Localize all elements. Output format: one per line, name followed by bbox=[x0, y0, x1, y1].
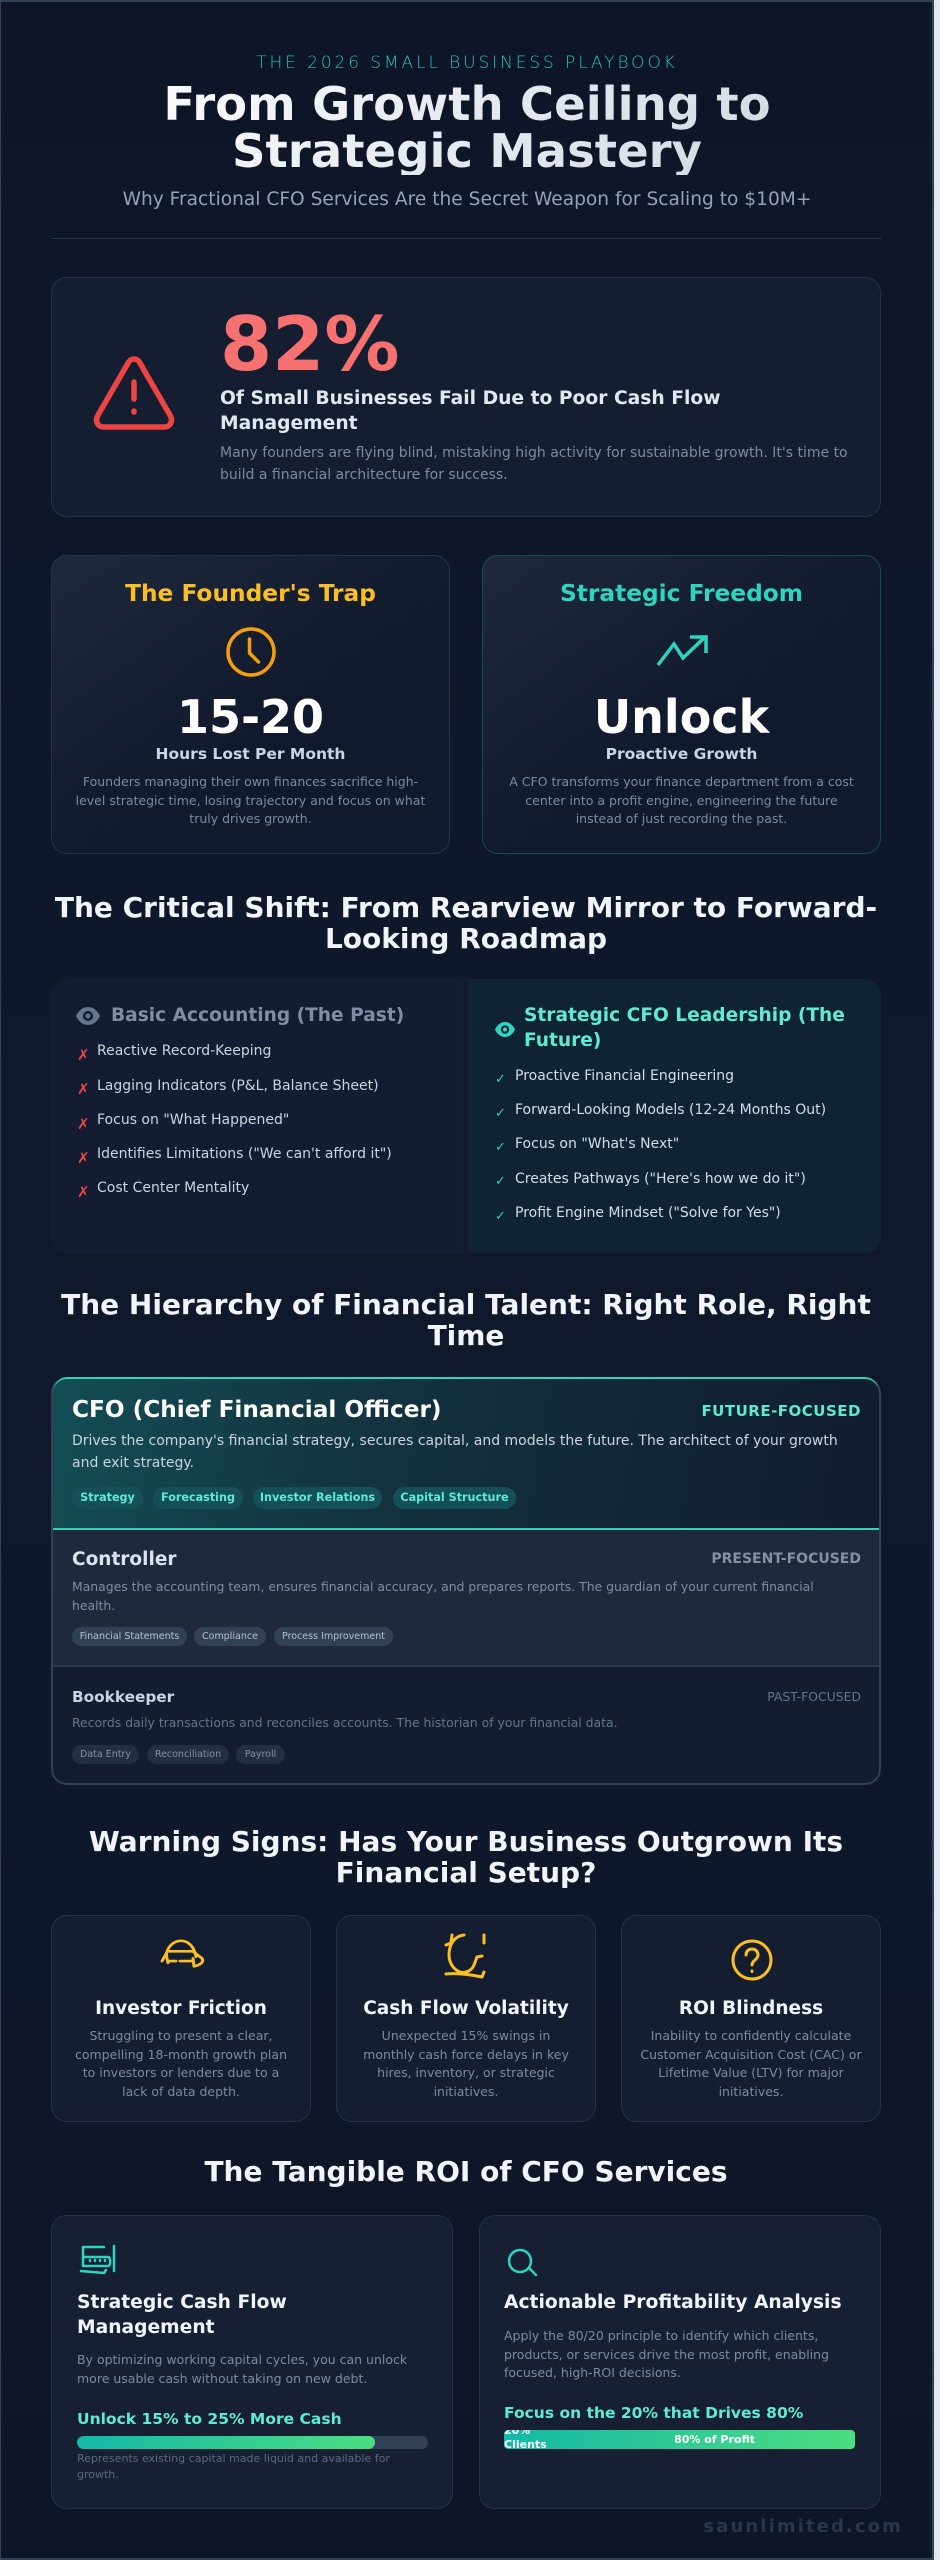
tags bbox=[72, 1627, 393, 1646]
metric label: Unlock 15% to 25% More Cash bbox=[77, 2410, 342, 2428]
tags bbox=[80, 1487, 516, 1509]
headline: Of Small Businesses Fail Due to Poor Cash Flow bbox=[220, 388, 720, 409]
description: Unexpected 15% swings in bbox=[382, 2028, 550, 2043]
tags: Strategy bbox=[80, 1491, 135, 1504]
big number: 82% bbox=[220, 300, 400, 388]
heading: warning signs bbox=[89, 1825, 843, 1889]
panel: cash flow volatility bbox=[336, 1915, 596, 2122]
tier title: Controller bbox=[72, 1549, 176, 1570]
subtitle: Why Fractional CFO Services Are the Secret Weapon for Scaling to $10M+ bbox=[123, 189, 811, 210]
description: and exit strategy. bbox=[72, 1455, 194, 1471]
description bbox=[72, 1579, 814, 1613]
list bbox=[77, 1043, 392, 1201]
description bbox=[77, 2352, 407, 2386]
description: focused, high-ROI decisions. bbox=[504, 2365, 681, 2380]
watermark: saunlimited.com bbox=[703, 2516, 903, 2537]
metric label: Focus on the 20% that Drives 80% bbox=[504, 2404, 803, 2422]
description: center into a profit engine, engineering the future bbox=[525, 793, 838, 808]
sublabel: Hours Lost Per Month bbox=[156, 745, 345, 763]
description bbox=[363, 2028, 569, 2099]
icon: investor bbox=[160, 1940, 204, 1968]
list: Identifies Limitations ("We can't afford it") bbox=[97, 1146, 392, 1162]
tier: controller bbox=[51, 1529, 881, 1667]
tags: Investor Relations bbox=[260, 1491, 375, 1504]
icon: eye grey bbox=[76, 1007, 100, 1025]
description: hires, inventory, or strategic bbox=[377, 2065, 555, 2080]
description: A CFO transforms your finance department from a cost bbox=[509, 774, 854, 789]
list: ✗ bbox=[77, 1115, 90, 1133]
title: From Growth Ceiling to bbox=[163, 77, 771, 131]
description: health. bbox=[72, 1598, 115, 1613]
list: ✗ bbox=[77, 1183, 90, 1201]
big number: 15-20 bbox=[177, 690, 324, 744]
description: products, or services drive the most profit, enabling bbox=[504, 2347, 829, 2362]
heading: Strategic Freedom bbox=[560, 580, 803, 607]
tags: Payroll bbox=[245, 1749, 276, 1760]
list: Reactive Record-Keeping bbox=[97, 1043, 271, 1059]
list: ✓ bbox=[495, 1106, 506, 1121]
list: Proactive Financial Engineering bbox=[515, 1068, 734, 1084]
heading: the critical shift: Looking Roadmap bbox=[325, 922, 607, 955]
panel: investor friction bbox=[51, 1915, 311, 2122]
description: Records daily transactions and reconciles accounts. The historian of your financial data. bbox=[72, 1715, 618, 1730]
note: growth. bbox=[77, 2468, 119, 2481]
description: Founders managing their own finances sacrifice high- bbox=[83, 774, 418, 789]
description: Manages the accounting team, ensures financial accuracy, and prepares reports. The guardian of your current financial bbox=[72, 1579, 814, 1594]
panel: strategic cash flow management bbox=[51, 2215, 453, 2509]
description bbox=[76, 774, 426, 826]
description: truly drives growth. bbox=[189, 811, 312, 826]
80/20 bar bbox=[504, 2430, 855, 2449]
description: initiatives. bbox=[434, 2084, 498, 2099]
focus label: PRESENT-FOCUSED bbox=[711, 1551, 861, 1567]
list: ✓ bbox=[495, 1140, 506, 1155]
description: Many founders are flying blind, mistaking high activity for sustainable growth. It's time to bbox=[220, 445, 848, 461]
description bbox=[220, 445, 848, 483]
80% segment: 80% of Profit bbox=[674, 2433, 755, 2446]
list: ✓ bbox=[495, 1209, 506, 1224]
heading: warning signs: Warning Signs: Has Your Business Outgrown Its bbox=[89, 1825, 843, 1858]
column: basic accounting bbox=[51, 979, 462, 1253]
card title: Strategic Cash Flow bbox=[77, 2292, 287, 2313]
icon: volatility bbox=[444, 1934, 486, 1978]
icon: cash register bbox=[80, 2244, 116, 2274]
list: Focus on "What Happened" bbox=[97, 1112, 289, 1128]
heading: The Founder's Trap bbox=[125, 580, 376, 607]
column heading bbox=[524, 1005, 845, 1051]
description: lack of data depth. bbox=[122, 2084, 240, 2099]
progress bar bbox=[77, 2436, 428, 2449]
description bbox=[640, 2028, 862, 2099]
progress fill bbox=[77, 2436, 375, 2449]
column: strategic CFO leadership bbox=[468, 979, 881, 1253]
list: Creates Pathways ("Here's how we do it") bbox=[515, 1171, 806, 1187]
description: Customer Acquisition Cost (CAC) or bbox=[640, 2047, 862, 2062]
tier title: Bookkeeper bbox=[72, 1688, 174, 1706]
title bbox=[67, 81, 867, 175]
list: ✗ bbox=[77, 1046, 90, 1064]
description: more usable cash without taking on new debt. bbox=[77, 2371, 367, 2386]
icon: magnifier bbox=[508, 2248, 538, 2276]
tags: Compliance bbox=[202, 1631, 258, 1642]
tags: Data Entry bbox=[80, 1749, 131, 1760]
description bbox=[504, 2328, 829, 2380]
description: Drives the company's financial strategy, secures capital, and models the future. The architect of your growth bbox=[72, 1433, 838, 1449]
note bbox=[77, 2452, 390, 2481]
focus label: FUTURE-FOCUSED bbox=[701, 1402, 861, 1420]
panel: strategic freedom bbox=[482, 555, 881, 854]
heading: hierarchy of financial talent: Time bbox=[428, 1319, 504, 1352]
big number: Unlock bbox=[594, 690, 769, 744]
header bbox=[123, 53, 811, 210]
tags: Forecasting bbox=[161, 1491, 235, 1504]
list: ✗ bbox=[77, 1080, 90, 1098]
heading: the critical shift: The Critical Shift: From Rearview Mirror to Forward- bbox=[55, 891, 877, 924]
description: By optimizing working capital cycles, you can unlock bbox=[77, 2352, 407, 2367]
heading: hierarchy of financial talent bbox=[61, 1288, 871, 1352]
headline bbox=[220, 388, 720, 434]
title: Strategic Mastery bbox=[232, 124, 702, 178]
icon: trending up bbox=[656, 635, 708, 666]
focus label: PAST-FOCUSED bbox=[767, 1689, 861, 1704]
list: ✓ bbox=[495, 1174, 506, 1189]
panel: 82% hero stat bbox=[51, 277, 881, 517]
description: compelling 18-month growth plan bbox=[75, 2047, 287, 2062]
eyebrow: THE 2026 SMALL BUSINESS PLAYBOOK bbox=[256, 53, 678, 73]
description: initiatives. bbox=[719, 2084, 783, 2099]
description: build a financial architecture for success. bbox=[220, 467, 508, 483]
icon: eye teal bbox=[495, 1022, 515, 1037]
tier title: CFO (Chief Financial Officer) bbox=[72, 1396, 441, 1423]
heading: the critical shift bbox=[55, 891, 877, 955]
description: monthly cash force delays in key bbox=[363, 2047, 569, 2062]
description: Apply the 80/20 principle to identify which clients, bbox=[504, 2328, 818, 2343]
list: ✗ bbox=[77, 1149, 90, 1167]
sublabel: Proactive Growth bbox=[606, 745, 757, 763]
description: Inability to confidently calculate bbox=[651, 2028, 851, 2043]
card title: Investor Friction bbox=[95, 1998, 267, 2019]
tags: Process Improvement bbox=[282, 1631, 385, 1642]
icon: clock bbox=[226, 627, 276, 677]
column heading: Strategic CFO Leadership (The bbox=[524, 1005, 845, 1026]
description bbox=[509, 774, 854, 826]
column heading: Future) bbox=[524, 1030, 601, 1051]
list bbox=[495, 1068, 826, 1224]
tier: bookkeeper background bbox=[53, 1667, 879, 1783]
description: instead of just recording the past. bbox=[576, 811, 787, 826]
tags bbox=[72, 1745, 285, 1764]
card title: Management bbox=[77, 2317, 215, 2338]
card title: Actionable Profitability Analysis bbox=[504, 2292, 842, 2313]
headline: Management bbox=[220, 413, 358, 434]
icon: warning triangle bbox=[94, 356, 174, 430]
heading: tangible ROI: The Tangible ROI of CFO Services bbox=[204, 2155, 728, 2188]
panel: hierarchy bbox=[51, 1377, 881, 1785]
tier: CFO bbox=[51, 1377, 881, 1530]
tags: Capital Structure bbox=[400, 1491, 509, 1504]
list: Focus on "What's Next" bbox=[515, 1136, 679, 1152]
column heading: Basic Accounting (The Past) bbox=[111, 1005, 404, 1026]
list: Profit Engine Mindset ("Solve for Yes") bbox=[515, 1205, 781, 1221]
description: to investors or lenders due to a bbox=[83, 2065, 279, 2080]
heading: hierarchy of financial talent: The Hierarchy of Financial Talent: Right Role, Right bbox=[61, 1288, 871, 1321]
heading: warning signs: Financial Setup? bbox=[336, 1856, 596, 1889]
note: Represents existing capital made liquid and available for bbox=[77, 2452, 390, 2465]
panel: the founder's trap bbox=[51, 555, 450, 854]
description: Lifetime Value (LTV) for major bbox=[658, 2065, 844, 2080]
panel: actionable profitability analysis bbox=[479, 2215, 881, 2509]
panel: ROI blindness bbox=[621, 1915, 881, 2122]
description bbox=[75, 2028, 287, 2099]
card title bbox=[77, 2292, 287, 2338]
card title: Cash Flow Volatility bbox=[363, 1998, 569, 2019]
tags: Reconciliation bbox=[155, 1749, 221, 1760]
description: level strategic time, losing trajectory and focus on what bbox=[76, 793, 425, 808]
list: Lagging Indicators (P&L, Balance Sheet) bbox=[97, 1078, 379, 1094]
card title: ROI Blindness bbox=[679, 1998, 823, 2019]
icon: question circle bbox=[732, 1940, 772, 1980]
description bbox=[72, 1433, 838, 1471]
description: Struggling to present a clear, bbox=[90, 2028, 272, 2043]
list: ✓ bbox=[495, 1072, 506, 1087]
list: Cost Center Mentality bbox=[97, 1180, 249, 1196]
20% segment bbox=[504, 2430, 547, 2449]
list: Forward-Looking Models (12-24 Months Out) bbox=[515, 1102, 826, 1118]
tags: Financial Statements bbox=[80, 1631, 179, 1642]
panel: comparison bbox=[51, 979, 881, 1253]
